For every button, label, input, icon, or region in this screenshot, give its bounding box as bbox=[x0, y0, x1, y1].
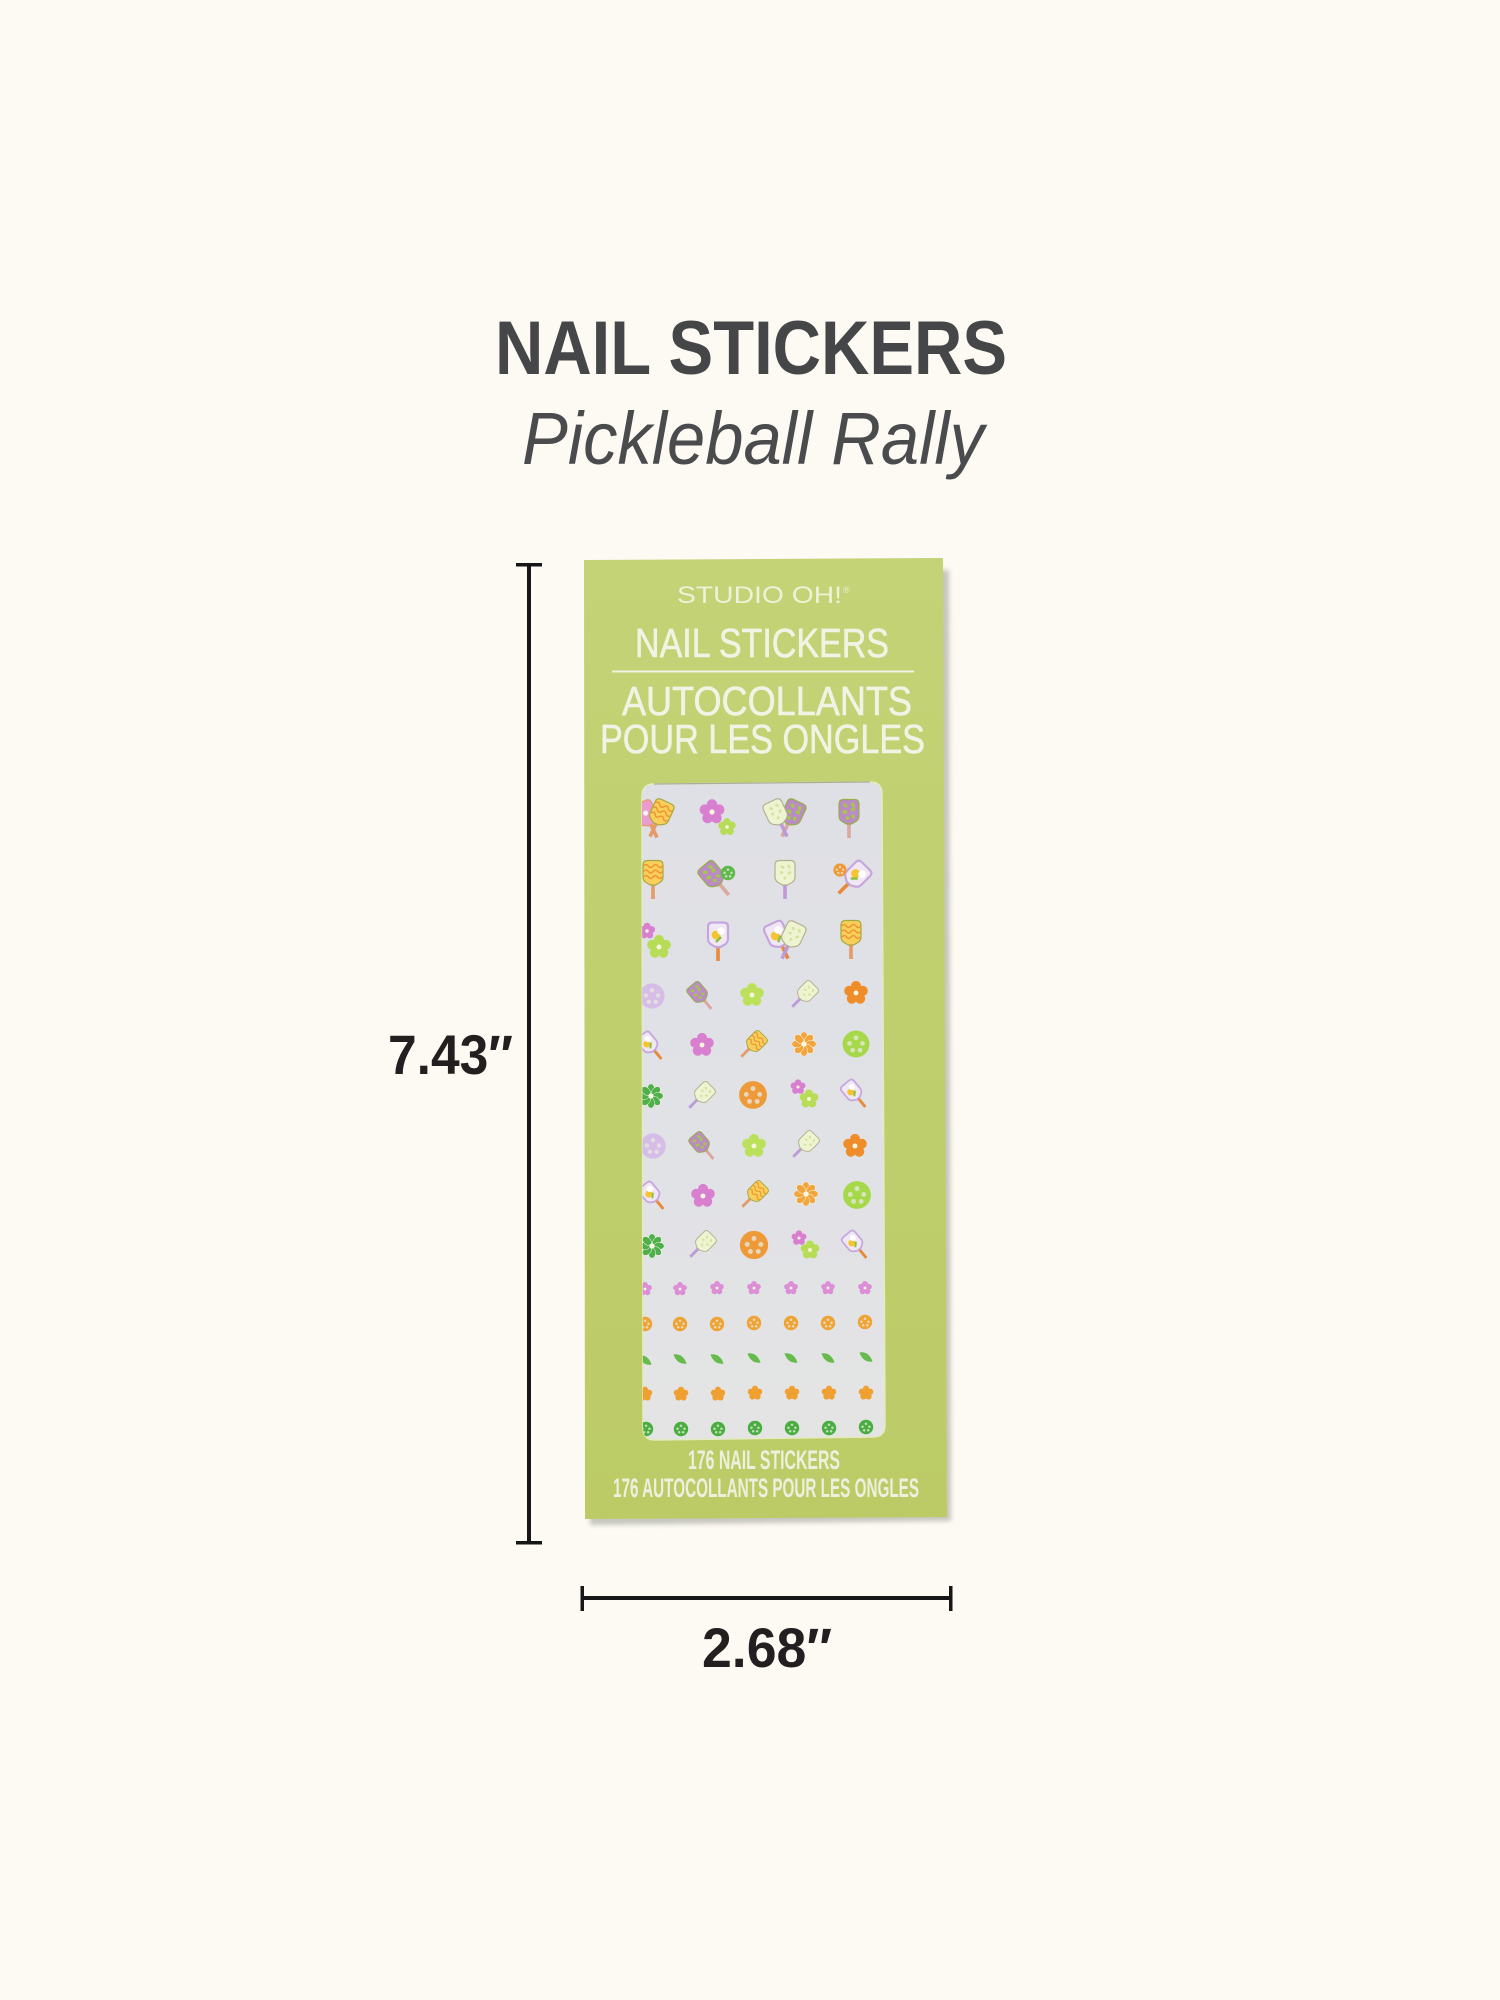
package shadow bbox=[590, 570, 951, 1525]
sticker row 6 bbox=[642, 1078, 866, 1109]
small orange stars row bbox=[638, 1386, 873, 1401]
package heading french line 2: POUR LES ONGLES bbox=[600, 716, 925, 762]
width dimension bracket bbox=[580, 1586, 952, 1611]
height dimension bracket bbox=[516, 563, 542, 1544]
sticker row 1 bbox=[642, 798, 860, 838]
package heading english: NAIL STICKERS bbox=[635, 620, 889, 666]
width label: 2.68″ bbox=[702, 1616, 832, 1679]
sticker row 8 bbox=[642, 1180, 871, 1210]
subtitle: Pickleball Rally bbox=[522, 397, 988, 480]
small green balls row bbox=[639, 1420, 873, 1436]
green card bbox=[584, 558, 947, 1519]
infographic: nail stickers dimensions bbox=[390, 320, 1004, 1668]
sticker row 5 bbox=[642, 1030, 870, 1060]
sticker row 2 bbox=[643, 859, 873, 901]
product package bbox=[584, 558, 951, 1525]
title: NAIL STICKERS bbox=[495, 306, 1007, 391]
sticker count french: 176 AUTOCOLLANTS POUR LES ONGLES bbox=[613, 1473, 919, 1503]
small orange balls row bbox=[638, 1315, 872, 1331]
sticker row 4 bbox=[642, 980, 868, 1010]
sticker row 9 bbox=[642, 1230, 868, 1260]
brand name: ® bbox=[843, 585, 850, 595]
sticker sheet bbox=[632, 797, 874, 1436]
small pink flowers row bbox=[638, 1281, 872, 1295]
sticker count english: 176 NAIL STICKERS bbox=[688, 1445, 840, 1475]
package heading french line 1: AUTOCOLLANTS bbox=[622, 678, 912, 724]
sticker row 3 bbox=[639, 919, 861, 963]
brand name: STUDIO OH! bbox=[677, 582, 842, 609]
sticker window bbox=[642, 782, 885, 1440]
height label: 7.43″ bbox=[388, 1023, 513, 1086]
sticker row 7 bbox=[642, 1130, 867, 1160]
small green leaves row bbox=[642, 1352, 872, 1365]
